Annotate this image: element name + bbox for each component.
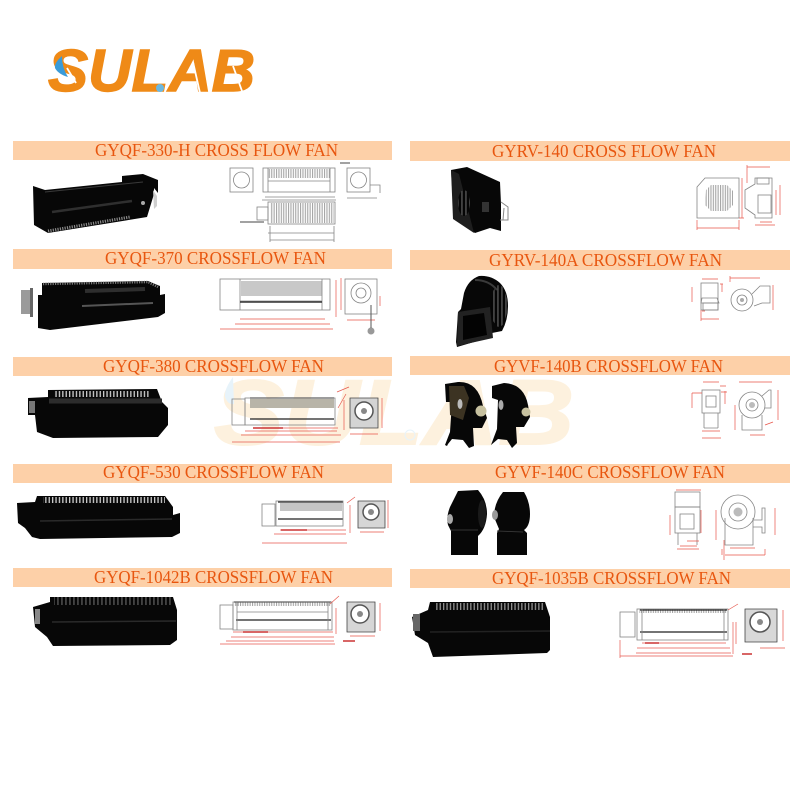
section: GYRV-140 [410, 141, 790, 233]
product photo: GYQF-1042B [33, 597, 177, 646]
section: GYQF-1035B [410, 568, 790, 658]
heading: GYQF-370: GYQF-370 CROSSFLOW FAN [105, 248, 326, 268]
heading: GYQF-530: GYQF-530 CROSSFLOW FAN [103, 462, 324, 482]
fan left [447, 490, 487, 555]
heading: GYVF-140B: GYVF-140B CROSSFLOW FAN [494, 356, 723, 376]
fan right [491, 383, 530, 448]
product photo: GYQF-370 [21, 281, 165, 330]
section: GYQF-330-H [13, 140, 392, 242]
heading: GYVF-140B [410, 356, 790, 376]
heading: GYQF-1042B [13, 567, 392, 587]
heading: GYVF-140C [410, 462, 790, 483]
logo: SULAB [48, 38, 255, 104]
section: GYQF-380 [13, 356, 392, 442]
heading: GYQF-330-H [13, 140, 392, 160]
technical drawing: GYVF-140C [670, 490, 775, 560]
heading: GYQF-330-H: GYQF-330-H CROSS FLOW FAN [95, 140, 338, 160]
section: GYQF-530 [13, 462, 392, 543]
technical drawing: GYQF-370 [220, 278, 380, 334]
fan left [445, 382, 487, 448]
section: GYVF-140C [410, 462, 790, 560]
technical drawing: GYRV-140A [692, 276, 773, 321]
heading: GYQF-380 [13, 356, 392, 376]
heading: GYRV-140A: GYRV-140A CROSSFLOW FAN [489, 250, 722, 270]
technical drawing: GYQF-1042B [220, 596, 380, 644]
heading: GYQF-370 [13, 248, 392, 269]
heading: GYQF-1035B [410, 568, 790, 588]
product photo: GYRV-140A [456, 276, 508, 347]
technical drawing: GYQF-530 [262, 497, 388, 543]
product photo: GYVF-140C [447, 490, 530, 555]
section: GYVF-140B [410, 356, 790, 448]
section: GYQF-1042B [13, 567, 392, 646]
product photo: GYQF-330-H [33, 174, 158, 233]
product photo: GYQF-1035B [412, 602, 550, 657]
technical drawing: GYQF-330-H [230, 163, 380, 242]
heading: GYQF-380: GYQF-380 CROSSFLOW FAN [103, 356, 324, 376]
section: GYQF-370 [13, 248, 392, 334]
product photo: GYQF-530 [17, 496, 180, 539]
logo dot [156, 84, 164, 92]
background watermark: SULAB [214, 362, 574, 464]
heading: GYVF-140C: GYVF-140C CROSSFLOW FAN [495, 462, 725, 482]
heading: GYRV-140: GYRV-140 CROSS FLOW FAN [492, 141, 716, 161]
technical drawing: GYRV-140 [697, 165, 780, 230]
heading: GYRV-140 [410, 141, 790, 161]
section: GYRV-140A [410, 250, 790, 347]
heading: GYQF-1042B: GYQF-1042B CROSSFLOW FAN [94, 567, 333, 587]
heading: GYRV-140A [410, 250, 790, 270]
technical drawing: GYVF-140B [692, 382, 778, 438]
product photo: GYQF-380 [28, 389, 168, 438]
product photo: GYRV-140 [451, 167, 508, 233]
logo water drop [55, 56, 68, 77]
technical drawing: GYQF-380 [232, 387, 382, 442]
technical drawing: GYQF-1035B [620, 604, 785, 658]
heading: GYQF-530 [13, 462, 392, 483]
heading: GYQF-1035B: GYQF-1035B CROSSFLOW FAN [492, 568, 731, 588]
fan right [492, 492, 530, 555]
product photo: GYVF-140B [445, 382, 530, 448]
